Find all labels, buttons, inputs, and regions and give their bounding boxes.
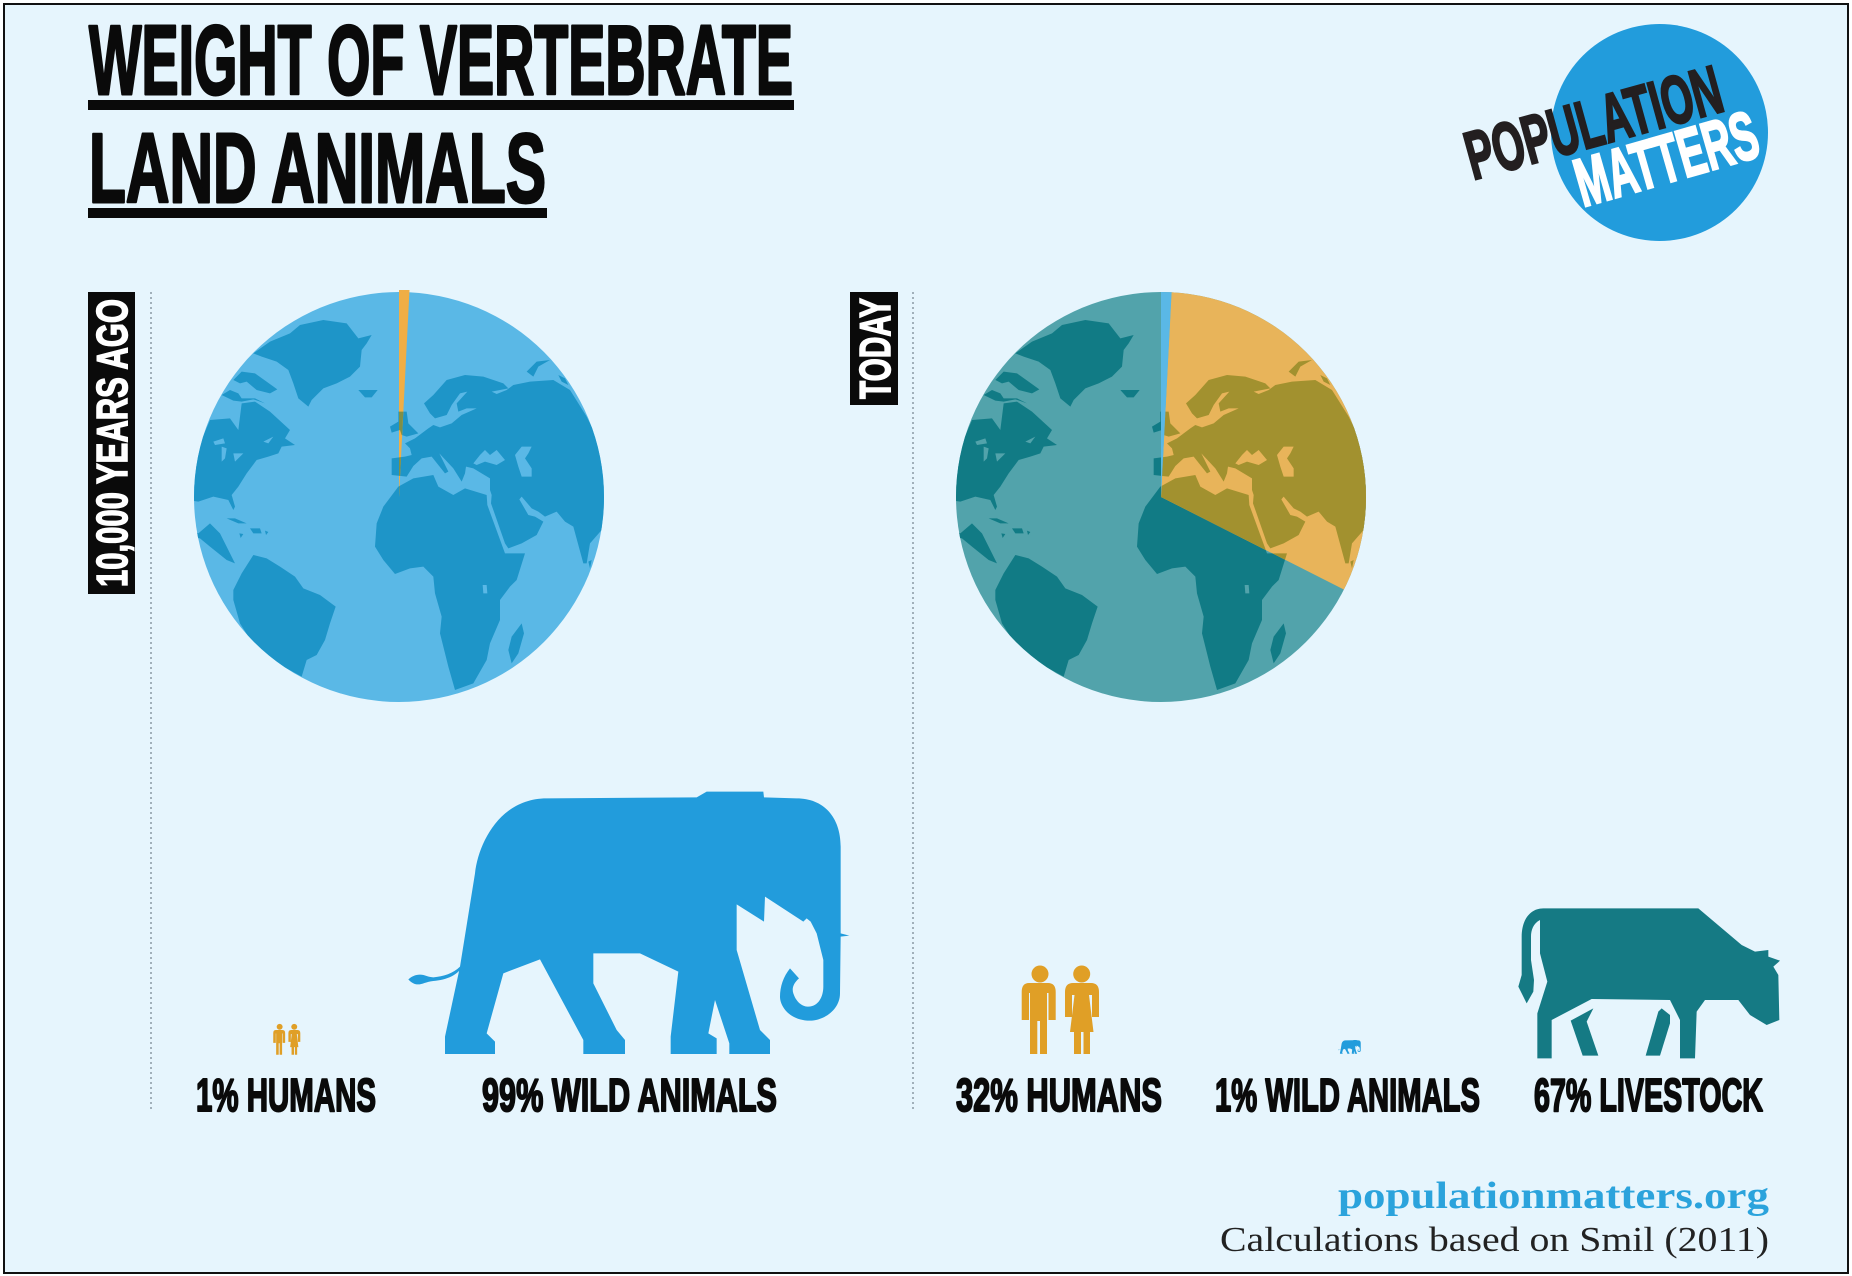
title: WEIGHT OF VERTEBRATE: [89, 5, 793, 115]
label: 99% wild animals: 99% WILD ANIMALS: [482, 1069, 777, 1121]
footer: website: populationmatters.org: [1338, 1175, 1769, 1217]
icon: small humans: [273, 1024, 300, 1055]
title: [88, 5, 794, 223]
footer: source: Calculations based on Smil (2011): [1220, 1220, 1769, 1259]
pie globe: 1% humans, 99% wild animals: [187, 290, 610, 702]
label: 1% wild animals: 1% WILD ANIMALS: [1215, 1069, 1480, 1121]
section label: 10,000 years ago: 10,000 YEARS AGO: [88, 299, 137, 587]
section label: today: TODAY: [851, 298, 900, 399]
icon: large humans: [1022, 966, 1099, 1054]
panel: today: [850, 280, 1780, 1121]
label: 1% humans: 1% HUMANS: [196, 1069, 376, 1121]
logo: Population Matters: [1457, 24, 1768, 241]
label: 32% humans: 32% HUMANS: [956, 1069, 1162, 1121]
panel: 10,000 years ago: [88, 290, 849, 1121]
icon: large elephant: [408, 792, 849, 1054]
pie globe: 32% humans, 1% wild animals, 67% livestock: [956, 292, 1366, 702]
title: LAND ANIMALS: [89, 113, 546, 223]
icon: tiny elephant: [1338, 1040, 1361, 1054]
icon: cow: [1518, 908, 1780, 1058]
section label: today: [850, 292, 900, 405]
